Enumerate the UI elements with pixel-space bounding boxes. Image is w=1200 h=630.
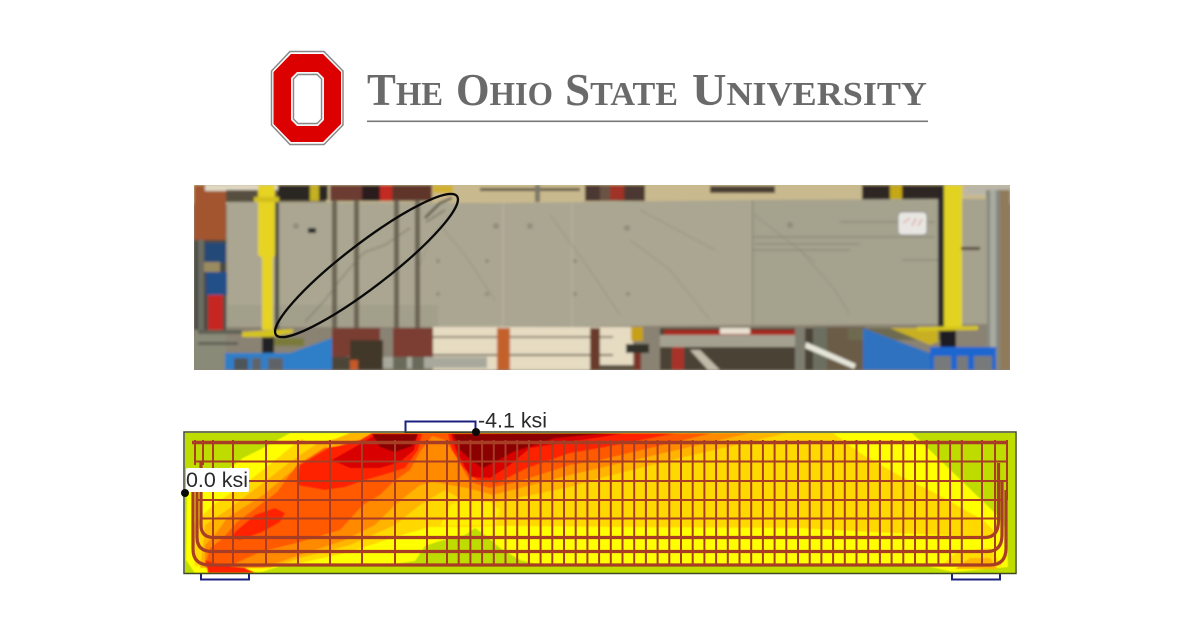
wordmark: THE bbox=[367, 65, 443, 115]
hooked bottom bars bbox=[193, 462, 1006, 565]
right support plate bbox=[952, 570, 1000, 580]
photo: diagonal shear crack bbox=[305, 198, 452, 322]
beam outline bbox=[184, 432, 1016, 574]
photo: right background column bbox=[986, 190, 1010, 370]
wordmark bbox=[367, 65, 927, 115]
photo: left background rack bbox=[194, 238, 228, 332]
photo: vertical rods bbox=[332, 200, 420, 330]
photo: white label on beam bbox=[898, 212, 927, 235]
label: 0.0 ksi: 0.0 ksi bbox=[186, 469, 248, 492]
photo: lab floor below beam bbox=[367, 327, 865, 370]
label: minus 4.1 ksi: -4.1 ksi bbox=[478, 410, 547, 432]
annotation: black ellipse around shear crack bbox=[274, 192, 460, 338]
heat map contours bbox=[184, 432, 1016, 574]
top longitudinal bar bbox=[192, 441, 1008, 444]
left support plate bbox=[201, 570, 249, 580]
photo: upper background bbox=[194, 185, 1010, 242]
university logo bbox=[272, 52, 928, 144]
wordmark rule bbox=[367, 120, 928, 122]
icon: block O bbox=[272, 52, 343, 144]
marker: zero stress point bbox=[181, 489, 189, 497]
photo: right blue support bbox=[848, 328, 996, 370]
photo: failed concrete beam in test frame bbox=[190, 179, 1014, 374]
stress contour model of the beam bbox=[181, 410, 1016, 580]
wordmark: OHIO bbox=[456, 65, 553, 115]
marker: peak stress point bbox=[472, 428, 480, 436]
wordmark: STATE bbox=[565, 65, 678, 115]
photo: brown load frames bbox=[332, 328, 433, 370]
photo: concrete beam bbox=[227, 199, 987, 327]
photo: yellow columns bbox=[242, 185, 980, 337]
rebar cage bbox=[192, 440, 1008, 565]
wordmark: UNIVERSITY bbox=[692, 65, 927, 115]
photo: left blue support bbox=[198, 330, 332, 370]
horizontal bars bbox=[194, 462, 1007, 518]
top loading plate bbox=[406, 422, 476, 432]
vertical stirrups bbox=[195, 440, 1007, 565]
